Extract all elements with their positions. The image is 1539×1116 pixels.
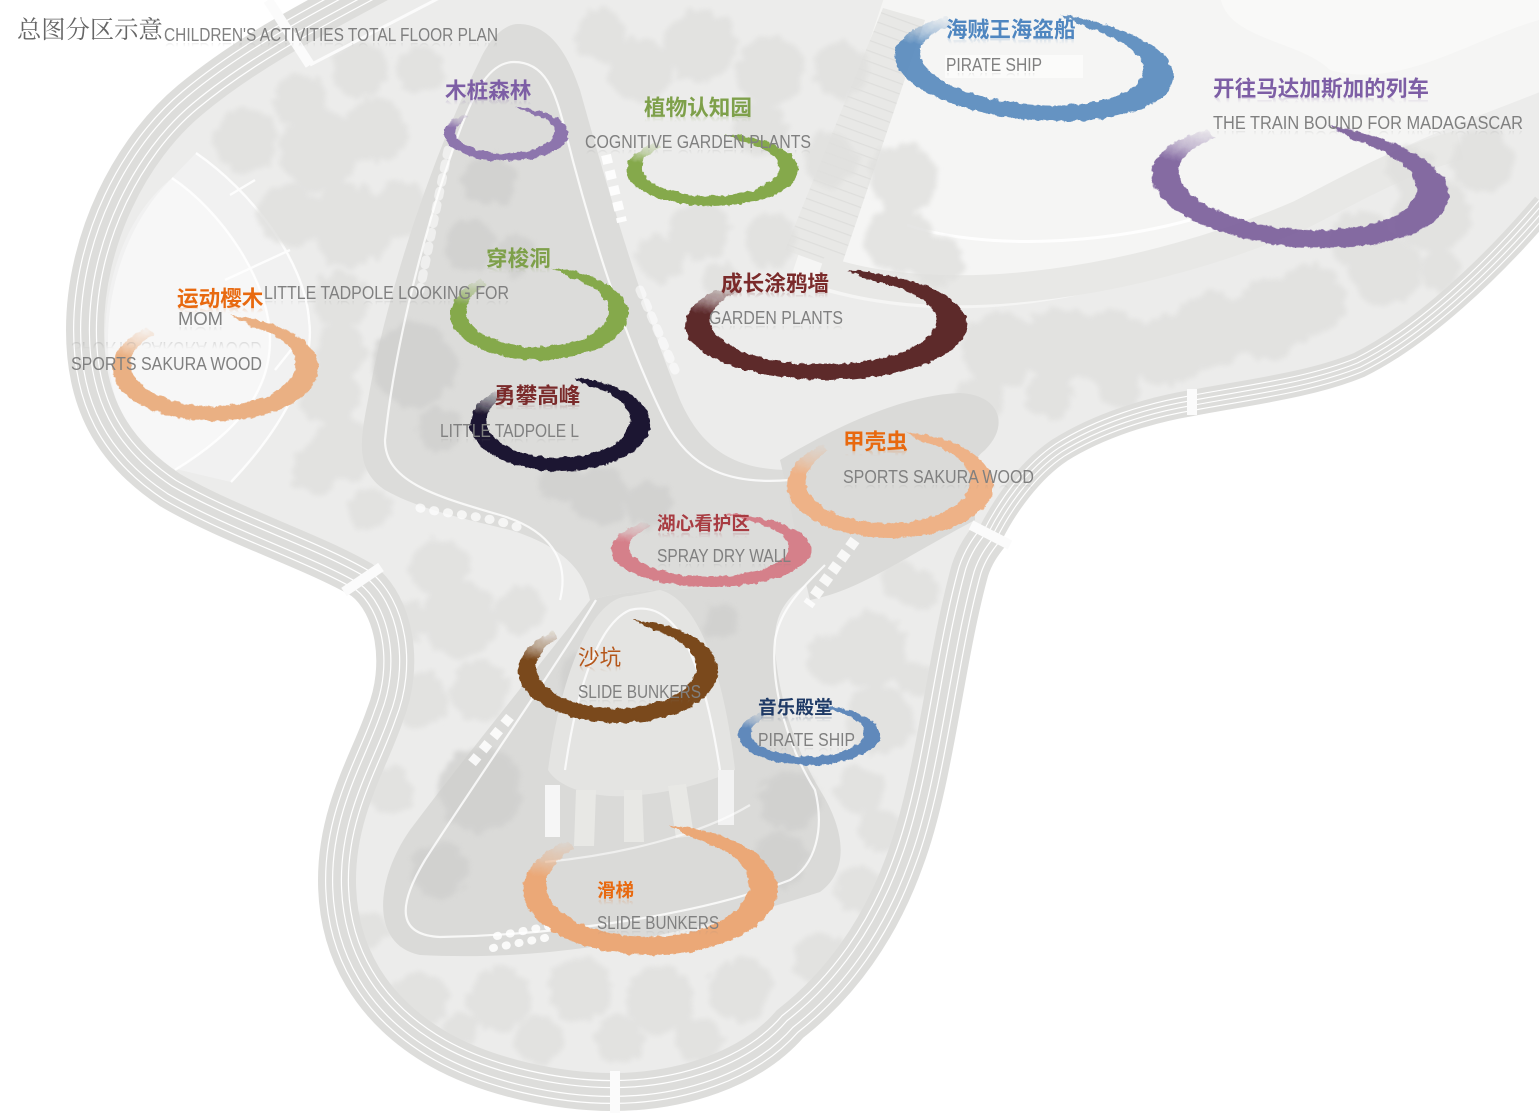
brush rings [112, 1, 1454, 955]
label: beetle: 甲壳虫 [843, 429, 908, 454]
white panel behind pirate ship label [945, 55, 1083, 78]
white pedestrian loops [385, 62, 825, 937]
label: plant garden: 植物认知园 [644, 95, 752, 120]
label: pirate ship, music hall: PIRATE SHIP [758, 730, 855, 750]
ring: slide [523, 826, 777, 955]
label: sports sakura wood en: SPORTS SAKURA WOOD [71, 354, 262, 374]
label: brave climbing peak: 勇攀高峰 [494, 383, 580, 408]
boardwalk diagonal [785, 8, 925, 270]
title: 总图分区示意 [17, 17, 163, 44]
ring: shuttle cave [450, 268, 628, 360]
label: growth graffiti wall: 成长涂鸦墙 [721, 271, 829, 296]
track crossings and service lane [268, 0, 1192, 1113]
label: shuttle cave: 穿梭洞 [486, 246, 551, 271]
ring: lake care zone [611, 513, 811, 587]
label: mom: MOM [178, 309, 223, 329]
ring: beetle [787, 433, 993, 538]
label: pirate ship en: PIRATE SHIP [946, 55, 1042, 75]
label: slide bunkers, slide: SLIDE BUNKERS [597, 913, 719, 933]
ring: sand pit [518, 620, 718, 723]
checker paving strips [420, 150, 855, 948]
ring: music hall [738, 705, 880, 765]
stairs and ramps [545, 770, 734, 846]
plaza on the left [105, 153, 310, 482]
ring: pirate ship [894, 14, 1174, 122]
amphitheatre stage [548, 590, 735, 796]
subtitle: CHILDREN'S ACTIVITIES TOTAL FLOOR PLAN [164, 25, 498, 45]
label: little tadpole looking for: LITTLE TADPOLE LOOKING FOR [264, 283, 509, 303]
label: pirate ship cn: 海贼王海盗船 [946, 17, 1076, 42]
running track, right arm [990, 205, 1539, 535]
label: beetle en: SPORTS SAKURA WOOD [843, 467, 1034, 487]
lower island [383, 560, 841, 956]
label: spray dry wall: SPRAY DRY WALL [657, 546, 791, 566]
label: train cn: 开往马达加斯加的列车 [1213, 76, 1429, 101]
tree canopy [213, 9, 1514, 1064]
label: music hall: 音乐殿堂 [758, 697, 833, 718]
label: garden plants: GARDEN PLANTS [709, 308, 843, 328]
label: sand pit: 沙坑 [578, 645, 621, 670]
ring: wood pile forest [444, 107, 568, 161]
label: slide bunkers, sand pit: SLIDE BUNKERS [578, 682, 701, 702]
light lawn, upper right [790, 0, 1539, 308]
ring: brave climbing peak [470, 377, 650, 471]
curved promenade [820, 145, 1460, 290]
small play loop at right [780, 393, 999, 600]
ring: sports sakura wood [112, 316, 318, 421]
ring: growth graffiti wall [685, 271, 967, 380]
label: little tadpole: LITTLE TADPOLE L [440, 421, 579, 441]
label: wood pile forest: 木桩森林 [445, 78, 531, 103]
label: cognitive garden plants: COGNITIVE GARDEN PLANTS [585, 132, 811, 152]
label: slide: 滑梯 [597, 880, 634, 901]
label: lake care zone: 湖心看护区 [657, 513, 750, 534]
upper central island [362, 24, 800, 600]
running track, left and lower loop [85, 0, 990, 1092]
ring: plant garden [626, 134, 798, 206]
label: sports sakura wood cn: 运动樱木 [177, 286, 263, 311]
darker island planting [373, 154, 820, 898]
ring: train to Madagascar [1151, 125, 1450, 250]
